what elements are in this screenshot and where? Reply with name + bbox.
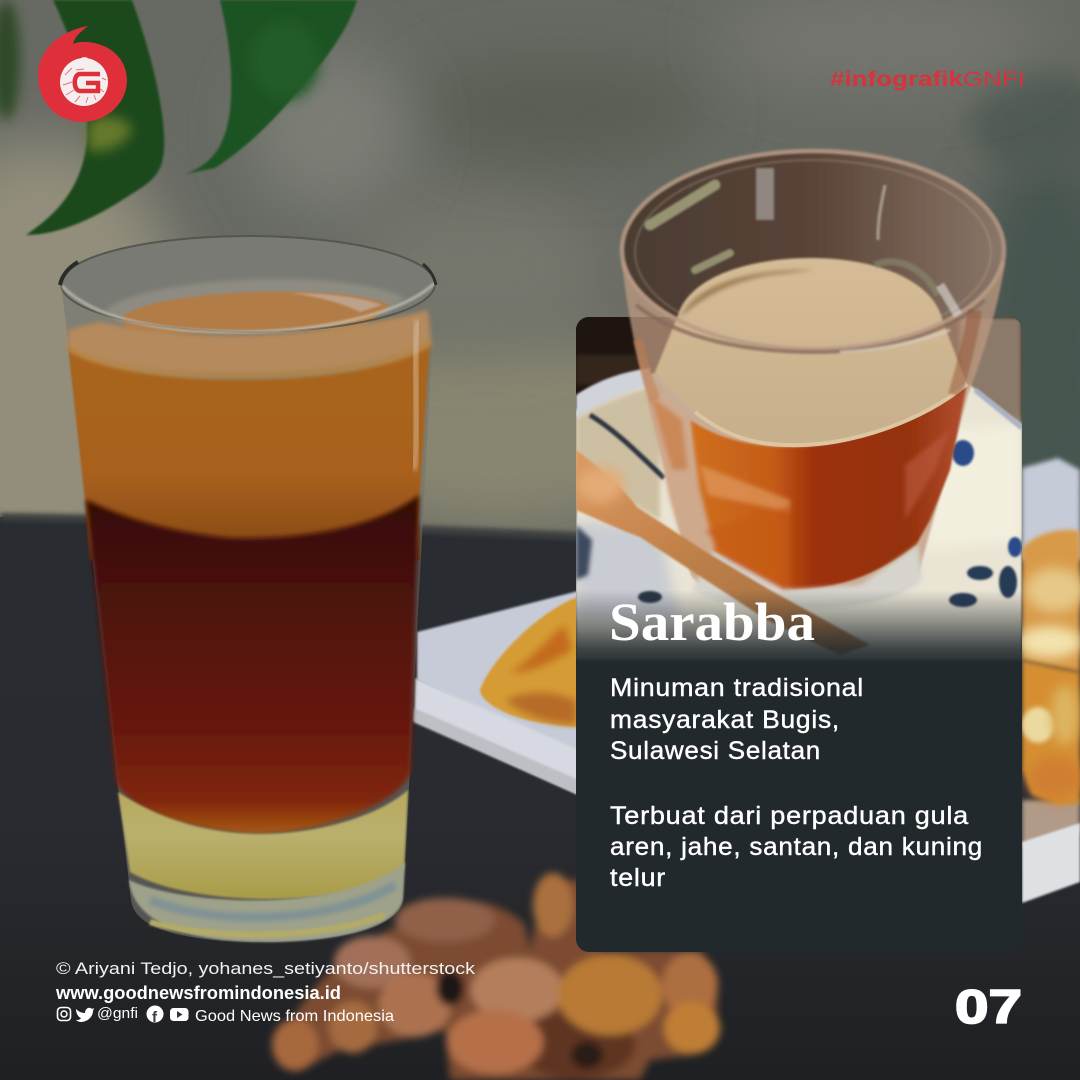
card dark base (576, 317, 1022, 952)
hashtag: #infografik GNFI (830, 68, 1025, 91)
spoon (576, 450, 870, 655)
plate and pastry left (413, 588, 590, 800)
right glass: foam (655, 258, 967, 445)
plate and pastries right (1018, 458, 1080, 903)
card photo: background and saucer (576, 317, 1022, 660)
glass interior above drink (62, 237, 434, 331)
handle: @gnfi (97, 1006, 138, 1022)
text block: ingredients (610, 802, 983, 892)
cream bottom layer (118, 790, 408, 899)
text block: ingredients: telur (610, 864, 666, 892)
page name: Good News from Indonesia (195, 1008, 394, 1025)
text block: origin: Sulawesi Selatan (610, 737, 821, 765)
icon: instagram (58, 1008, 70, 1020)
caramel layer (68, 342, 430, 560)
social media row (58, 1006, 394, 1026)
right glass: outer wall (622, 262, 1005, 606)
glass rim (61, 236, 435, 332)
drink surface (120, 292, 390, 335)
icon: monstera leaf right (185, 0, 357, 174)
caramel seen through rim (68, 310, 431, 375)
card: photo of sarabba with description (576, 151, 1022, 952)
left glass of layered sarabba (60, 236, 436, 942)
card bottom fade (576, 590, 1022, 668)
background: blurred wall (0, 0, 1080, 580)
text block: ingredients: Terbuat dari perpaduan gula (610, 802, 969, 830)
heading: Sarabba: Sarabba (609, 592, 815, 652)
icon: youtube (170, 1008, 188, 1021)
right glass: inside back wall (623, 152, 1003, 348)
text block: ingredients: aren, jahe, santan, dan kuning (610, 833, 983, 861)
icon: facebook (146, 1006, 164, 1026)
credit line: © Ariyani Tedjo, yohanes_setiyanto/shutterstock (56, 959, 476, 978)
right glass: rim and highlights (622, 151, 1004, 400)
icon: monstera leaf left (26, 0, 164, 235)
icon: facebook: f (152, 1009, 158, 1026)
table surface (0, 517, 1080, 1080)
right glass: tea (690, 384, 967, 590)
logo: GNFI red circle (38, 26, 127, 122)
ginger root (272, 873, 720, 1080)
icon: twitter (76, 1008, 94, 1022)
dark brown middle layer (86, 495, 419, 834)
glass base (129, 862, 405, 942)
website: www.goodnewsfromindonesia.id (55, 983, 341, 1003)
page number: 07 (955, 980, 1022, 1033)
right glass: tea reflection and sides (646, 385, 950, 610)
glass body (62, 288, 435, 942)
text block: origin: Minuman tradisional (610, 674, 864, 702)
text block: origin: masyarakat Bugis, (610, 706, 840, 734)
text block: origin (610, 674, 864, 765)
